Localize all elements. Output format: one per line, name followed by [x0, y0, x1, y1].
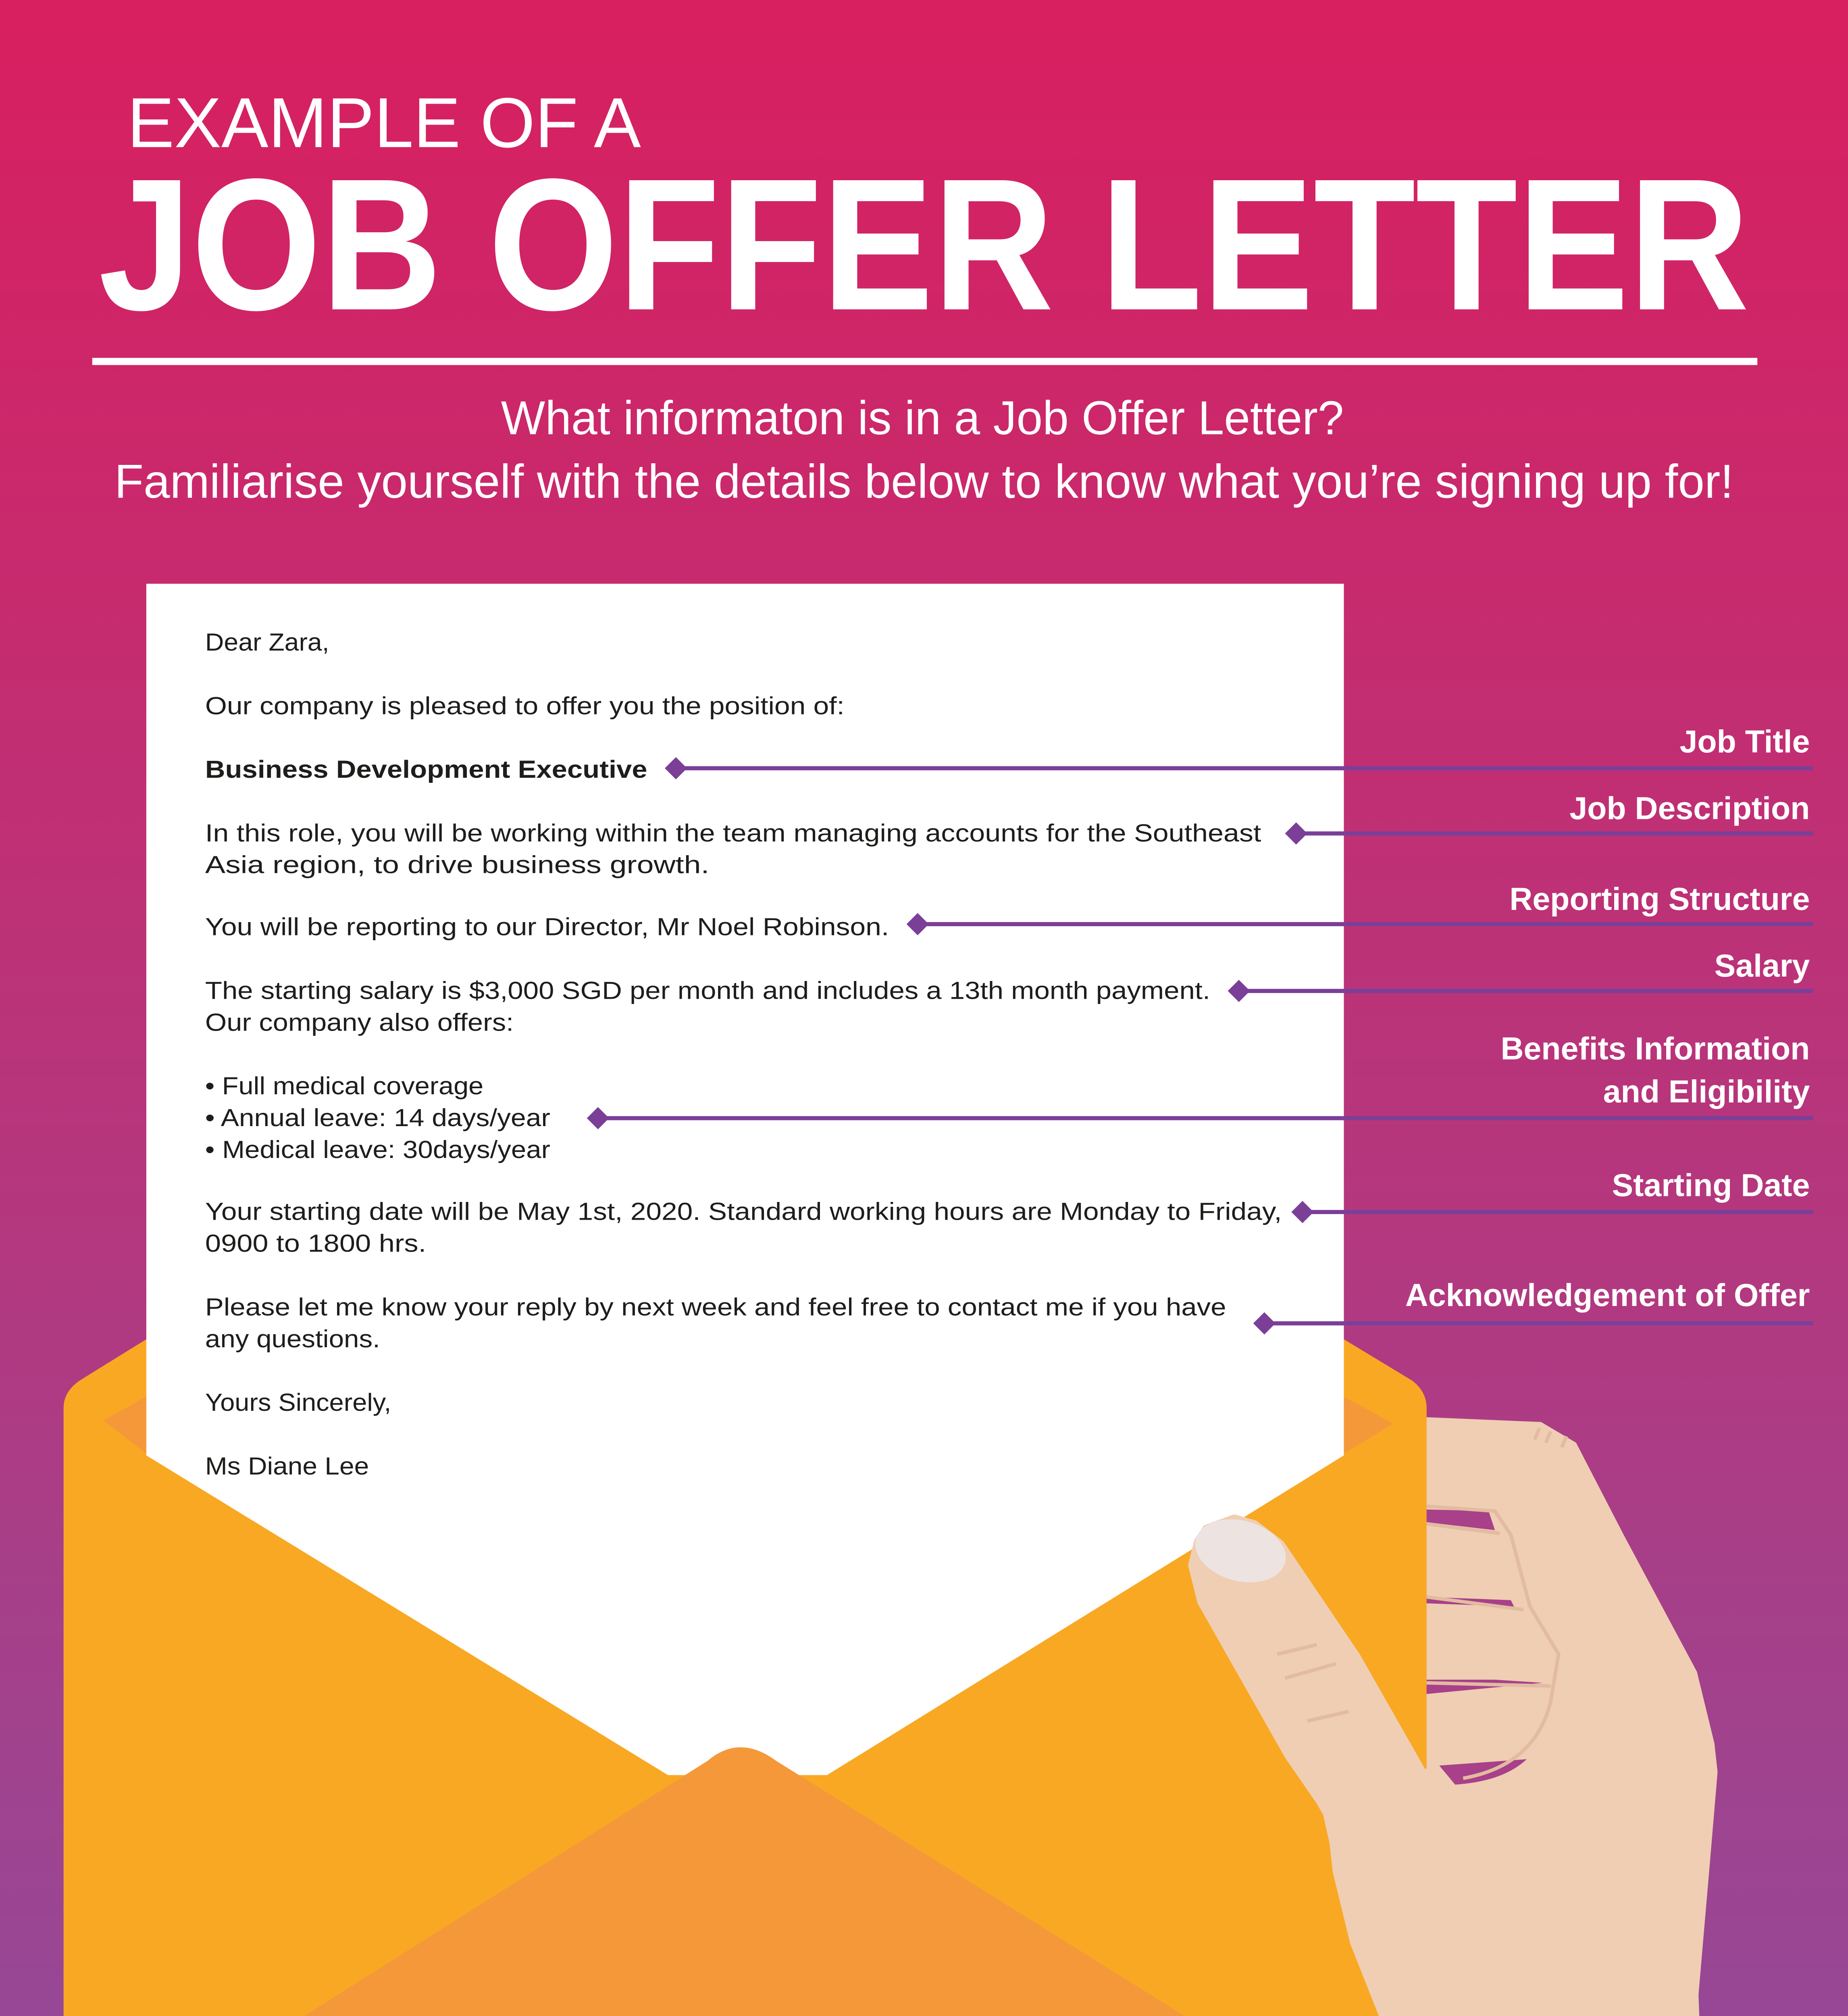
letter paper: Yours Sincerely,	[205, 1389, 391, 1416]
callout labels: Acknowledgement of Offer	[1405, 1277, 1810, 1313]
envelope front	[64, 1408, 1427, 2016]
letter paper: 0900 to 1800 hrs.	[205, 1230, 426, 1257]
letter paper: Our company is pleased to offer you the position of:	[205, 692, 845, 719]
letter paper: Please let me know your reply by next week and feel free to contact me if you have	[205, 1293, 1226, 1320]
letter paper: • Full medical coverage	[205, 1072, 483, 1100]
callout labels: Reporting Structure	[1509, 881, 1810, 916]
letter paper: • Medical leave: 30days/year	[205, 1136, 550, 1163]
letter paper: The starting salary is $3,000 SGD per month and includes a 13th month payment.	[205, 977, 1210, 1004]
letter paper: Business Development Executive	[205, 756, 647, 783]
subtitle: What informaton is in a Job Offer Letter?	[501, 392, 1344, 445]
callout labels	[1405, 724, 1810, 1313]
callouts	[587, 757, 1813, 1335]
callout labels: Salary	[1714, 948, 1810, 983]
letter paper: You will be reporting to our Director, Mr Noel Robinson.	[205, 913, 889, 941]
subtitle	[114, 392, 1734, 508]
letter paper: In this role, you will be working within the team managing accounts for the Southeast	[205, 819, 1261, 847]
letter paper: Dear Zara,	[205, 628, 329, 656]
callout labels: Job Title	[1679, 724, 1810, 759]
letter paper: Asia region, to drive business growth.	[205, 851, 709, 879]
hand	[1188, 1417, 1737, 2016]
envelope back	[64, 1339, 1427, 2016]
callout labels: Benefits Information	[1500, 1031, 1810, 1066]
letter paper: any questions.	[205, 1325, 380, 1352]
letter paper: Your starting date will be May 1st, 2020. Standard working hours are Monday to Friday,	[205, 1198, 1282, 1225]
title: EXAMPLE OF A	[127, 83, 641, 162]
letter paper: • Annual leave: 14 days/year	[205, 1104, 550, 1131]
letter paper	[146, 584, 1344, 1793]
letter paper: Our company also offers:	[205, 1008, 514, 1036]
callout labels: and Eligibility	[1603, 1074, 1810, 1109]
callout labels: Starting Date	[1612, 1168, 1810, 1203]
callout labels: Job Description	[1569, 791, 1810, 826]
letter paper: Ms Diane Lee	[205, 1452, 369, 1480]
subtitle: Familiarise yourself with the details below to know what you’re signing up for!	[114, 455, 1734, 508]
